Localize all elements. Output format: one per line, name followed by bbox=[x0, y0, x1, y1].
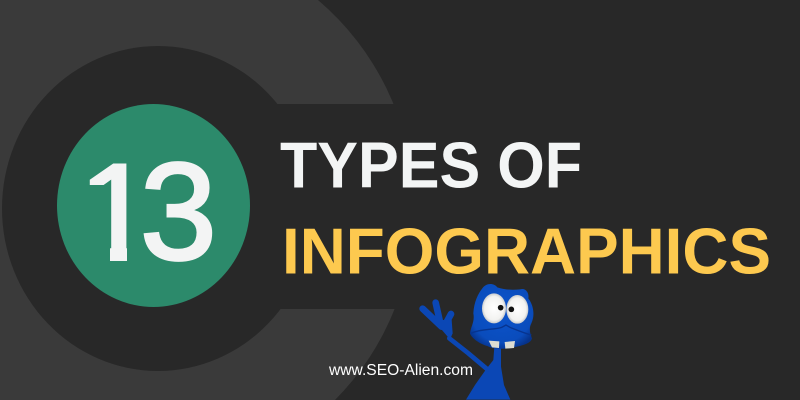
alien body bbox=[466, 347, 510, 400]
background: large grey circle bbox=[0, 0, 414, 400]
alien arm and hand bbox=[423, 303, 487, 369]
number 13: 3 bbox=[140, 135, 217, 289]
alien right tooth bbox=[505, 341, 515, 349]
number 13 bbox=[90, 161, 212, 262]
alien right pupil bbox=[508, 306, 514, 312]
website URL: www.SEO-Alien.com bbox=[328, 362, 473, 379]
alien left eye bbox=[482, 293, 506, 323]
alien left pupil bbox=[498, 305, 503, 310]
icon: blue alien mascot waving bbox=[423, 284, 533, 400]
alien left tooth bbox=[489, 341, 499, 348]
alien right eye bbox=[506, 295, 528, 324]
title line: TYPES OF: TYPES OF bbox=[280, 128, 582, 202]
number 13: 1 bbox=[78, 136, 155, 290]
title line: INFOGRAPHICS: INFOGRAPHICS bbox=[282, 214, 771, 288]
badge: green circle with number 13 bbox=[57, 104, 250, 307]
alien head bbox=[470, 284, 533, 349]
alien mouth bbox=[471, 325, 531, 335]
